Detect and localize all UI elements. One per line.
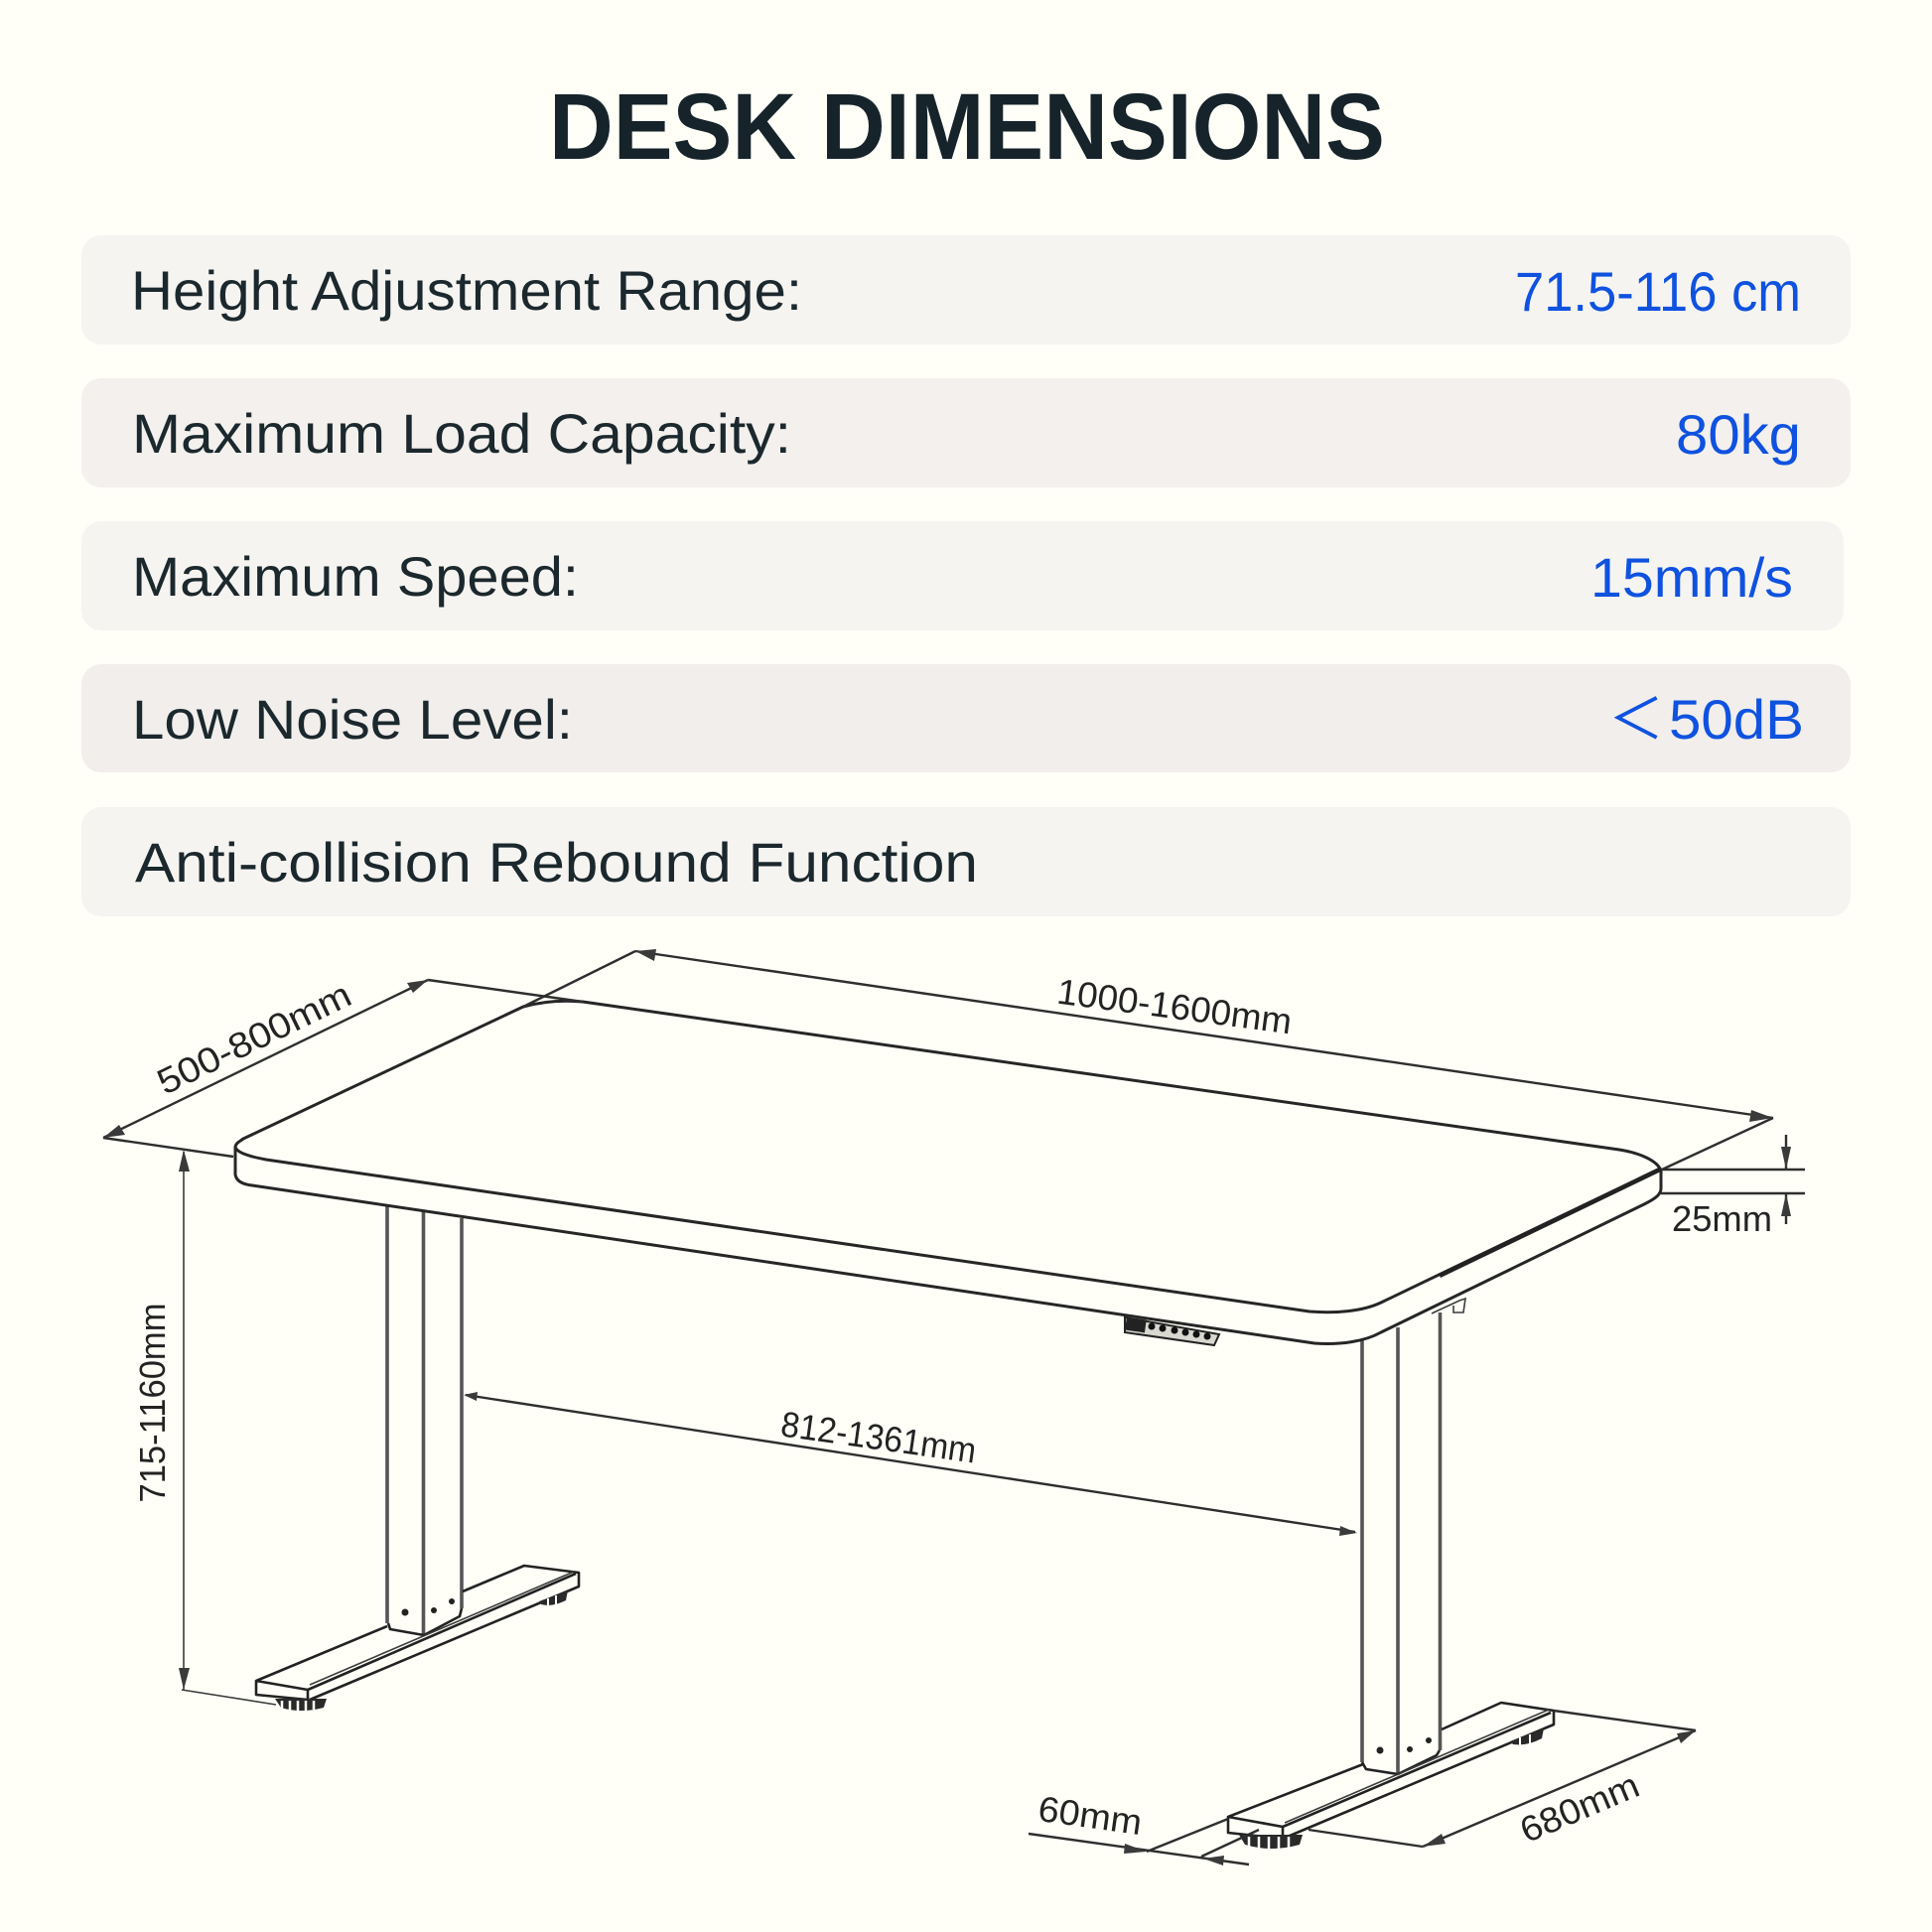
panel: low noise level bbox=[81, 664, 1851, 772]
dimension: 500-800mm: 500-800mm bbox=[151, 974, 357, 1102]
panel: height adjustment range: Height Adjustment Range: bbox=[131, 260, 802, 322]
panel: maximum load capacity: Maximum Load Capacity: bbox=[132, 403, 791, 465]
dimension: 60mm bbox=[1029, 1788, 1259, 1865]
panel: maximum load capacity bbox=[81, 378, 1851, 487]
dimension: 500-800mm bbox=[103, 974, 583, 1157]
panel: low noise level: 50dB bbox=[1669, 689, 1804, 751]
panel: maximum speed: Maximum Speed: bbox=[132, 546, 579, 608]
dimension: 812-1361mm bbox=[464, 1392, 1357, 1536]
panel: low noise level: Low Noise Level: bbox=[132, 689, 573, 751]
desk technical drawing bbox=[103, 949, 1805, 1865]
panel: anti-collision rebound function bbox=[81, 807, 1851, 916]
dimension: 25mm bbox=[1661, 1135, 1805, 1239]
dimension: 715-1160mm: 715-1160mm bbox=[132, 1303, 173, 1503]
dimension: 715-1160mm bbox=[132, 1150, 276, 1705]
control panel bbox=[1125, 1317, 1219, 1345]
panel: anti-collision rebound function: Anti-collision Rebound Function bbox=[135, 832, 978, 894]
panel: maximum speed bbox=[81, 521, 1844, 630]
desk left foot bbox=[256, 1566, 579, 1713]
desk left leg bbox=[387, 1206, 462, 1635]
dimension: 25mm: 25mm bbox=[1672, 1198, 1772, 1239]
desk right foot bbox=[1228, 1703, 1554, 1851]
dimension: 680mm bbox=[1309, 1711, 1696, 1851]
dimension: 60mm: 60mm bbox=[1035, 1788, 1145, 1843]
hook bbox=[1432, 1299, 1465, 1313]
dimension: 812-1361mm: 812-1361mm bbox=[778, 1403, 979, 1471]
panel: height adjustment range: 71.5-116 cm bbox=[1515, 261, 1801, 323]
panel: maximum load capacity: 80kg bbox=[1676, 404, 1801, 466]
title: DESK DIMENSIONS bbox=[549, 74, 1385, 180]
dimension: 1000-1600mm: 1000-1600mm bbox=[1054, 971, 1295, 1041]
panel: maximum speed: 15mm/s bbox=[1590, 547, 1793, 609]
desk right leg bbox=[1362, 1312, 1440, 1774]
dimension: 1000-1600mm bbox=[523, 949, 1773, 1170]
panel: height adjustment range bbox=[81, 235, 1851, 345]
panel: low noise level: ＜ bbox=[1608, 688, 1664, 751]
desk top bbox=[235, 1001, 1661, 1344]
dimension: 680mm: 680mm bbox=[1514, 1764, 1645, 1851]
